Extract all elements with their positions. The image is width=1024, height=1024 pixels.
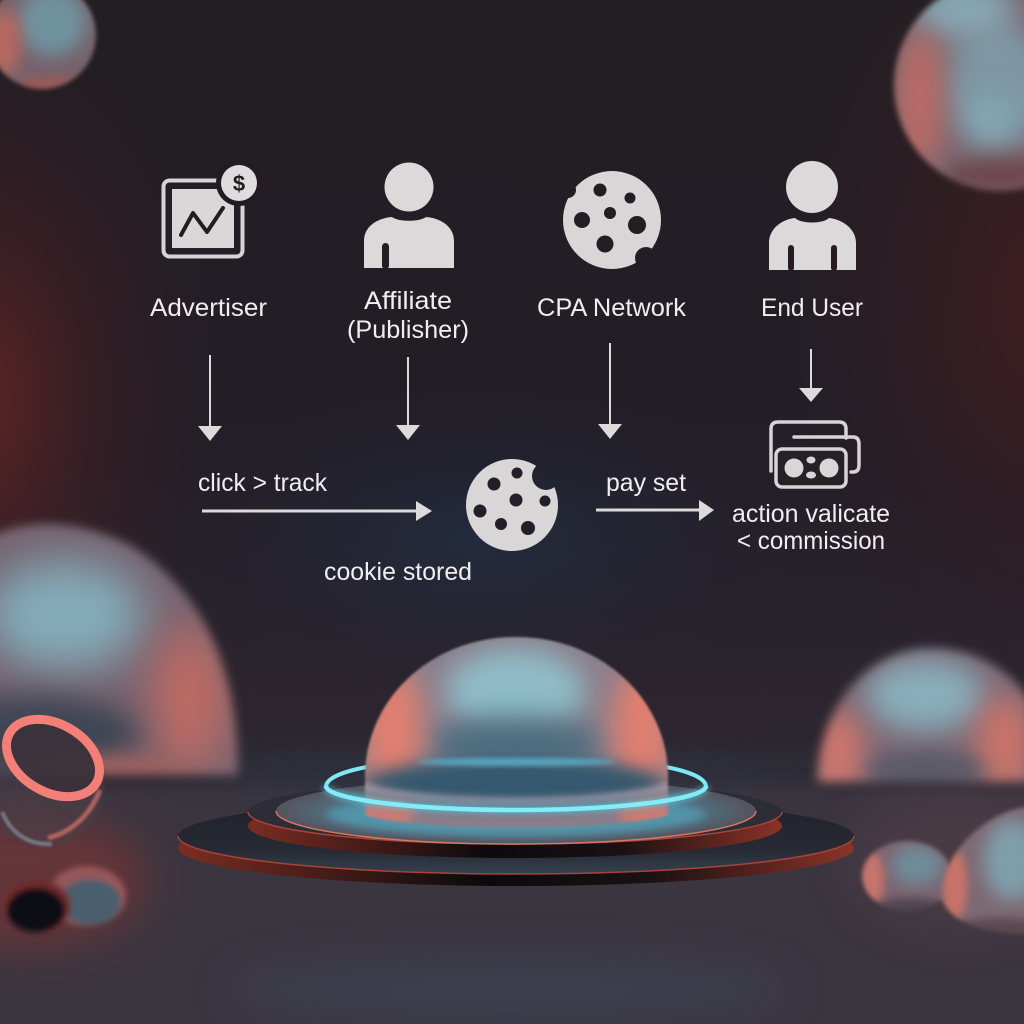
icon: stored cookie bbox=[466, 459, 558, 551]
label: cookie stored: cookie stored bbox=[324, 558, 472, 586]
arrow: click to cookie bbox=[202, 501, 432, 521]
arrow: end user down bbox=[799, 349, 823, 402]
lower platform bbox=[178, 798, 854, 886]
label: action validate, commission: < commission bbox=[737, 527, 885, 555]
label: Affiliate (Publisher): (Publisher) bbox=[347, 316, 469, 344]
middle platform bbox=[248, 780, 782, 858]
icon: advertiser chart with dollar badge: $ bbox=[233, 171, 245, 196]
icon: CPA network cookie bbox=[563, 171, 661, 269]
sphere: top right bbox=[890, 0, 1024, 195]
arrow: advertiser down bbox=[198, 355, 222, 441]
small sphere: right floor bbox=[859, 839, 950, 910]
large sphere: right floor bbox=[936, 802, 1024, 942]
icon: end user person bbox=[769, 161, 856, 271]
dome: left background bbox=[0, 510, 250, 784]
label: pay set: pay set bbox=[606, 469, 686, 497]
arrow: pay to action bbox=[596, 500, 714, 521]
icon: affiliate person bbox=[364, 162, 454, 269]
icon: banknotes bbox=[771, 422, 859, 487]
label: Advertiser: Advertiser bbox=[150, 294, 267, 322]
podium bbox=[178, 630, 854, 886]
sphere: top left bbox=[0, 0, 98, 92]
arrow: network down bbox=[598, 343, 622, 439]
glowing ring: front bbox=[326, 786, 706, 810]
glass dome bbox=[364, 636, 670, 829]
icon: advertiser chart with dollar badge bbox=[164, 160, 262, 256]
label: action validate, commission bbox=[732, 500, 890, 555]
label: End User: End User bbox=[761, 294, 863, 322]
glass sphere with coral ring bbox=[0, 704, 113, 847]
label: Affiliate (Publisher): Affiliate bbox=[364, 287, 452, 315]
floor bbox=[0, 754, 1024, 1024]
small spheres: bottom left bbox=[5, 866, 126, 932]
dome: right background bbox=[812, 645, 1024, 801]
label: click > track: click > track bbox=[198, 469, 327, 497]
label: CPA Network: CPA Network bbox=[537, 294, 686, 322]
ring: back sides bbox=[326, 767, 706, 786]
label: Affiliate (Publisher) bbox=[347, 287, 469, 344]
arrow: affiliate down bbox=[396, 357, 420, 440]
label: action validate, commission: action valicate bbox=[732, 500, 890, 528]
upper platform bbox=[276, 778, 756, 844]
